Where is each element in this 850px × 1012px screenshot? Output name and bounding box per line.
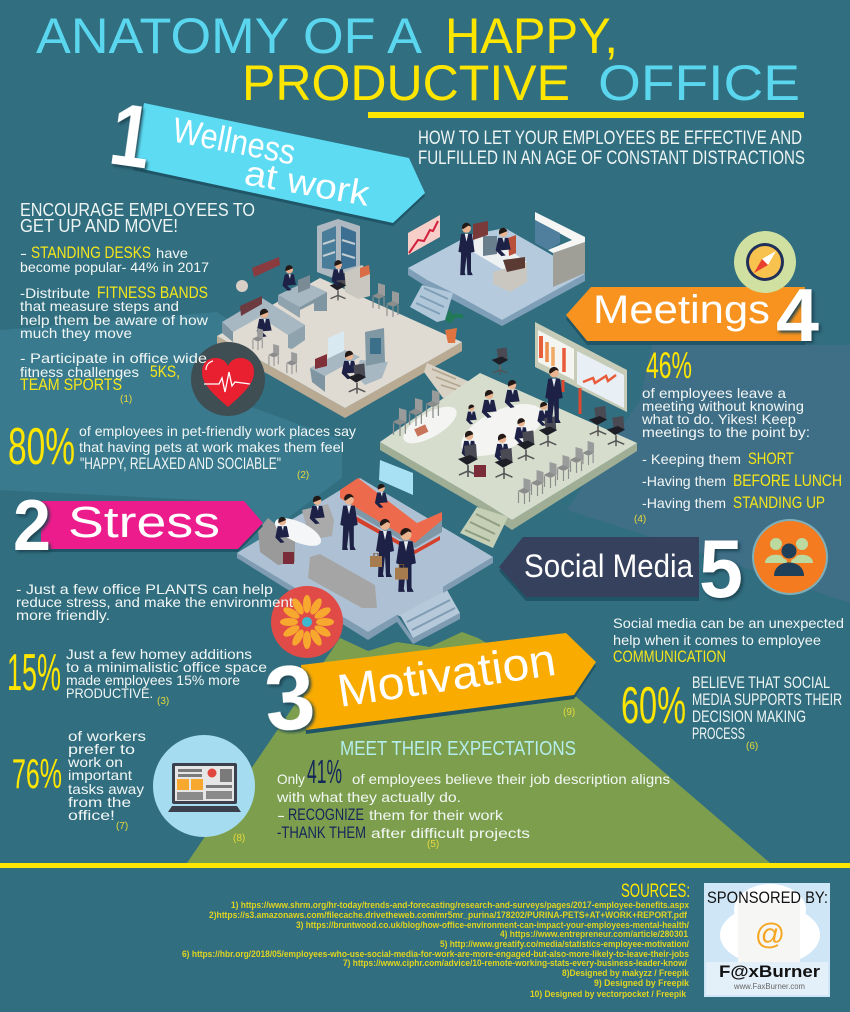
text: meet their expectations: 41% bbox=[307, 753, 342, 790]
text: meet their expectations: with what they actually do. bbox=[276, 789, 461, 805]
text: meet their expectations: (5) bbox=[427, 839, 439, 850]
sponsor box bbox=[704, 883, 830, 997]
text: encourage employees: have bbox=[156, 245, 188, 261]
sponsor box: @ bbox=[755, 918, 785, 951]
banner 3: motivation: 3 bbox=[261, 646, 318, 751]
stat: 60%: 60% bbox=[621, 677, 686, 735]
sources: 4) https://www.entrepreneur.com/article/280301 bbox=[500, 929, 689, 940]
stat: 76%: tasks away bbox=[68, 781, 144, 797]
stat: 15%: made employees 15% more bbox=[66, 672, 240, 688]
sponsor box: F@xBurner bbox=[719, 962, 820, 981]
subtitle bbox=[418, 128, 805, 169]
text: encourage employees: (1) bbox=[120, 394, 132, 405]
sources: 8)Designed by makyzz / Freepik bbox=[562, 968, 690, 979]
stat: 60% bbox=[621, 673, 842, 752]
stat: 76%: (7) bbox=[116, 821, 128, 832]
panel: green mountain backdrop bbox=[187, 632, 770, 863]
text: plants: reduce stress, and make the environment bbox=[16, 594, 293, 610]
stat: 46% meetings: what to do. Yikes! Keep bbox=[641, 411, 796, 427]
banner 5: social media bbox=[499, 522, 743, 615]
text: meet their expectations: after difficult projects bbox=[371, 825, 530, 841]
banner 3: motivation: Motivation bbox=[334, 633, 559, 717]
sources: 2)https://s3.amazonaws.com/filecache.drivetheweb.com/mr5mr_purina/178202/PURINA-PETS+AT+WORK+REPORT.pdf bbox=[209, 910, 688, 921]
title bbox=[36, 8, 800, 111]
sources bbox=[182, 881, 690, 1000]
text: encourage employees: 5KS, bbox=[150, 362, 180, 381]
banner 5: social media: Social Media bbox=[524, 548, 693, 584]
title: ANATOMY OF A bbox=[36, 8, 423, 64]
stat: 76%: prefer to bbox=[68, 741, 135, 757]
illustration: wellness office floor bbox=[217, 219, 470, 418]
title underline bbox=[368, 112, 804, 118]
sources: SOURCES: bbox=[621, 881, 690, 902]
stat: 80%: that having pets at work makes them feel bbox=[79, 439, 344, 455]
stat: 46% meetings: - Keeping them bbox=[642, 451, 741, 467]
title: PRODUCTIVE bbox=[242, 55, 570, 111]
title: OFFICE bbox=[598, 55, 800, 111]
sources: 5) http://www.greatify.co/media/statistics-employee-motivation/ bbox=[440, 939, 689, 950]
icon: people bbox=[752, 519, 828, 595]
text: encourage employees: that measure steps and bbox=[20, 298, 179, 314]
stat: 46% meetings: of employees leave a bbox=[642, 385, 786, 401]
stat: 76% bbox=[12, 728, 146, 832]
text: encourage employees: - bbox=[20, 245, 27, 261]
source mark 9: (9) bbox=[563, 707, 575, 718]
banner 1: wellness at work: Wellness bbox=[169, 111, 299, 173]
text: encourage employees: help them be aware of how bbox=[20, 312, 209, 328]
stat: 60%: PROCESS bbox=[692, 724, 745, 743]
text: plants bbox=[16, 581, 293, 623]
banner 4: meetings: 4 bbox=[776, 273, 819, 357]
icon: flower bbox=[271, 586, 343, 658]
text: encourage employees: -Distribute bbox=[20, 285, 90, 301]
text: meet their expectations bbox=[276, 738, 670, 850]
text: plants: more friendly. bbox=[16, 607, 110, 623]
sources: 9) Designed by Freepik bbox=[594, 978, 690, 989]
icon: laptop bbox=[153, 735, 255, 844]
title: HAPPY, bbox=[445, 8, 618, 64]
stat: 76%: work on bbox=[67, 754, 123, 770]
banner 4: meetings: Meetings bbox=[593, 288, 770, 332]
stat: 46% meetings: meetings to the point by: bbox=[642, 424, 810, 440]
text: encourage employees: GET UP AND MOVE! bbox=[20, 216, 178, 236]
icon: compass bbox=[734, 231, 796, 293]
sources: 10) Designed by vectorpocket / Freepik bbox=[530, 989, 687, 1000]
banner 2: stress: Stress bbox=[68, 498, 220, 547]
text: social media: Social media can be an unexpected bbox=[613, 615, 844, 631]
text: encourage employees: become popular- 44% in 2017 bbox=[20, 259, 209, 275]
banner 5: social media: 5 bbox=[699, 522, 743, 615]
stat: 46% meetings: (4) bbox=[634, 514, 646, 525]
banner 1: wellness at work: 1 bbox=[104, 84, 158, 187]
banner 1: wellness at work bbox=[104, 84, 425, 226]
stat: 76%: from the bbox=[68, 794, 131, 810]
stat: 46% meetings bbox=[634, 345, 842, 525]
text: meet their expectations: RECOGNIZE bbox=[288, 805, 364, 824]
footer divider bbox=[0, 863, 850, 868]
stat: 15%: Just a few homey additions bbox=[66, 646, 252, 662]
text: meet their expectations: - bbox=[277, 807, 286, 823]
banner 4: meetings bbox=[566, 273, 819, 357]
stat: 80%: (2) bbox=[297, 470, 309, 481]
text: encourage employees: - Participate in office wide bbox=[20, 350, 207, 366]
sources: 1) https://www.shrm.org/hr-today/trends-and-forecasting/research-and-surveys/pages/2017-employee-benefits.aspx bbox=[231, 900, 690, 911]
stat: 80% bbox=[8, 418, 356, 481]
stat: 15%: (3) bbox=[157, 696, 169, 707]
sponsor box: www.FaxBurner.com bbox=[733, 981, 805, 991]
stat: 46% meetings: SHORT bbox=[748, 449, 794, 468]
sponsor box: SPONSORED BY: bbox=[707, 888, 828, 907]
stat: 60%: (6) bbox=[746, 741, 758, 752]
text: encourage employees: TEAM SPORTS bbox=[20, 375, 122, 394]
stat: 15%: to a minimalistic office space bbox=[66, 659, 267, 675]
illustration: upper blue office floor bbox=[408, 212, 585, 326]
stat: 80%: 80% bbox=[8, 418, 75, 476]
text: meet their expectations: MEET THEIR EXPECTATIONS bbox=[340, 738, 576, 760]
text: encourage employees bbox=[20, 200, 255, 405]
stat: 46% meetings: -Having them bbox=[642, 495, 726, 511]
stat: 15%: 15% bbox=[7, 644, 61, 702]
text: meet their expectations: them for their work bbox=[369, 807, 504, 823]
banner 3: motivation bbox=[261, 633, 596, 751]
text: social media bbox=[613, 615, 844, 666]
stat: 46% meetings: 46% bbox=[646, 345, 692, 386]
sources: 6) https://hbr.org/2018/05/employees-who-use-social-media-for-work-are-more-engaged-but-also-more-likely-to-leave-their-jobs bbox=[182, 949, 689, 960]
stat: 15% bbox=[7, 644, 267, 707]
text: encourage employees: much they move bbox=[20, 325, 132, 341]
stat: 76%: office! bbox=[68, 807, 115, 823]
illustration: reception floor bbox=[237, 460, 493, 644]
banner 1: wellness at work: at work bbox=[242, 153, 373, 214]
icon: laptop: (8) bbox=[233, 833, 245, 844]
panel: lighter right backdrop bbox=[567, 345, 850, 603]
text: social media: COMMUNICATION bbox=[613, 647, 726, 666]
stat: 80%: of employees in pet-friendly work places say bbox=[79, 423, 356, 439]
illustration: meeting room floor bbox=[380, 322, 637, 548]
text: meet their expectations: -THANK THEM bbox=[277, 823, 366, 842]
stat: 46% meetings: STANDING UP bbox=[733, 493, 825, 512]
stat: 80%: "HAPPY, RELAXED AND SOCIABLE" bbox=[80, 454, 281, 473]
stat: 76%: 76% bbox=[12, 750, 62, 797]
panel: lighter left backdrop bbox=[0, 312, 342, 553]
text: encourage employees: fitness challenges bbox=[20, 364, 139, 380]
text: meet their expectations: of employees believe their job description aligns bbox=[352, 771, 670, 787]
text: encourage employees: ENCOURAGE EMPLOYEES TO bbox=[20, 200, 255, 220]
banner 2: stress bbox=[13, 486, 263, 566]
stat: 76%: of workers bbox=[68, 728, 146, 744]
stat: 60%: DECISION MAKING bbox=[692, 707, 806, 726]
icon: heart bbox=[191, 342, 265, 416]
text: plants: - Just a few office PLANTS can help bbox=[16, 581, 273, 597]
text: social media: help when it comes to employee bbox=[613, 632, 821, 648]
stat: 46% meetings: meeting without knowing bbox=[642, 398, 804, 414]
stat: 15%: PRODUCTIVE. bbox=[66, 685, 153, 701]
banner 2: stress: 2 bbox=[13, 486, 51, 566]
stat: 46% meetings: -Having them bbox=[642, 473, 726, 489]
text: encourage employees: FITNESS BANDS bbox=[97, 283, 208, 302]
sources: 3) https://bruntwood.co.uk/blog/how-office-environment-can-impact-your-employees-mental-health/ bbox=[296, 920, 689, 931]
stat: 76%: important bbox=[68, 767, 132, 783]
text: encourage employees: STANDING DESKS bbox=[31, 243, 151, 262]
sources: 7) https://www.ciphr.com/advice/10-remote-working-stats-every-business-leader-know/ bbox=[343, 958, 687, 969]
text: meet their expectations: Only bbox=[277, 771, 305, 787]
